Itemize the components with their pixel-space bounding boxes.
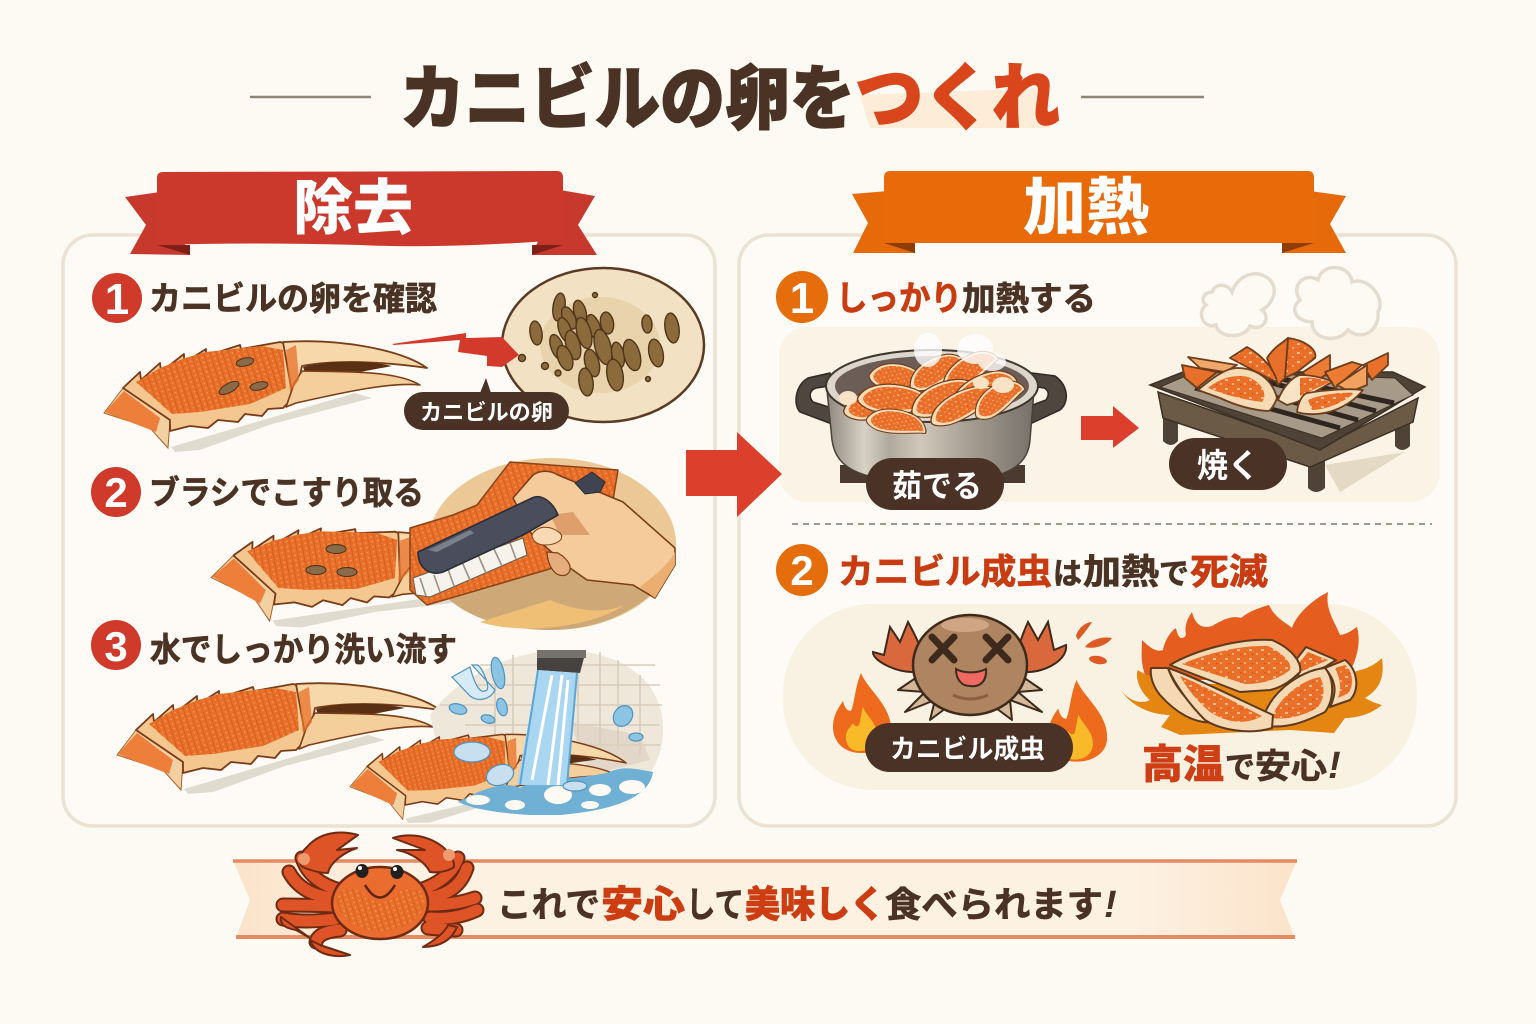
step 1 heading: 1 — [790, 274, 814, 323]
pointer: red arrow to eggs — [392, 333, 519, 367]
title: カニビルの卵を — [400, 60, 855, 138]
footer ribbon — [233, 860, 1297, 938]
grilled crab pieces — [1182, 338, 1388, 414]
callout: safe at high temperature: で — [1225, 750, 1255, 785]
crab claw being brushed — [206, 506, 541, 661]
ribbon: removal heading — [125, 171, 597, 255]
roaring fire — [1121, 592, 1383, 735]
step 3 heading: 3 — [104, 623, 128, 670]
footer message: 美味しく — [745, 884, 885, 925]
footer message — [497, 884, 1117, 926]
panel: removal — [63, 235, 715, 834]
background band: cooking methods — [779, 327, 1439, 502]
rinsing illustration — [348, 650, 663, 834]
brush illustration — [410, 458, 676, 630]
step 1 heading — [92, 273, 437, 324]
footer message: 安心 — [601, 884, 685, 925]
ribbon: removal heading: 除去 — [293, 175, 413, 242]
crab mascot — [281, 833, 477, 956]
crab claw with eggs — [104, 341, 427, 452]
footer message: これで — [497, 886, 600, 925]
magnified eggs — [502, 268, 704, 422]
step 2 heading: は — [1053, 558, 1082, 591]
callout: safe at high temperature: 安心 — [1255, 748, 1327, 786]
ribbon: heating heading — [852, 171, 1346, 253]
step 3 heading — [91, 620, 457, 670]
label: grill: 焼く — [1197, 447, 1259, 484]
steam clouds — [1201, 267, 1380, 338]
step 1 heading — [776, 271, 1096, 323]
title: つくれ — [855, 59, 1060, 139]
label: boil: 茹でる — [892, 469, 982, 504]
crab claw clean — [117, 683, 440, 794]
flames beside bug — [833, 673, 1107, 762]
step 2 heading — [91, 467, 424, 517]
footer message: 食べられます — [885, 886, 1103, 925]
step 2 heading — [776, 544, 1268, 596]
footer message: ! — [1104, 884, 1117, 926]
step 2 heading: で — [1159, 558, 1189, 591]
arrow: boil to grill — [1081, 406, 1139, 448]
step 1 heading: カニビルの卵を確認 — [149, 280, 437, 317]
step 2 heading: 2 — [104, 469, 128, 516]
label: boil — [866, 458, 1004, 510]
step 2 heading: 死滅 — [1190, 551, 1268, 592]
big arrow: removal to heating — [686, 432, 782, 517]
step 1 heading: 加熱する — [962, 280, 1096, 317]
footer message: して — [686, 886, 744, 925]
pot illustration — [796, 333, 1066, 483]
step 3 heading: 水でしっかり洗い流す — [150, 631, 457, 668]
step 1 heading: 1 — [105, 275, 129, 324]
dead crab-leech character — [873, 615, 1066, 720]
step 1 heading: しっかり — [836, 280, 962, 318]
callout: safe at high temperature: 高温 — [1142, 743, 1224, 787]
step 2 heading: 2 — [790, 547, 814, 594]
title — [250, 59, 1204, 139]
grill illustration — [1150, 372, 1425, 492]
label: crab-leech eggs: カニビルの卵 — [420, 400, 553, 425]
label: adult crab-leech: カニビル成虫 — [890, 734, 1045, 764]
step 2 heading: カニビル成虫 — [838, 553, 1052, 592]
label: adult crab-leech — [865, 723, 1073, 772]
label: crab-leech eggs — [404, 378, 569, 430]
background band: heat result — [783, 604, 1417, 790]
step 2 heading: ブラシでこすり取る — [149, 474, 424, 511]
ribbon: heating heading: 加熱 — [1023, 174, 1149, 243]
step 2 heading: 加熱 — [1083, 553, 1159, 592]
callout: safe at high temperature: ! — [1328, 745, 1341, 787]
callout: safe at high temperature — [1142, 743, 1341, 787]
panel: heating — [739, 235, 1456, 826]
label: grill — [1169, 438, 1287, 490]
splash marks — [1076, 622, 1112, 666]
